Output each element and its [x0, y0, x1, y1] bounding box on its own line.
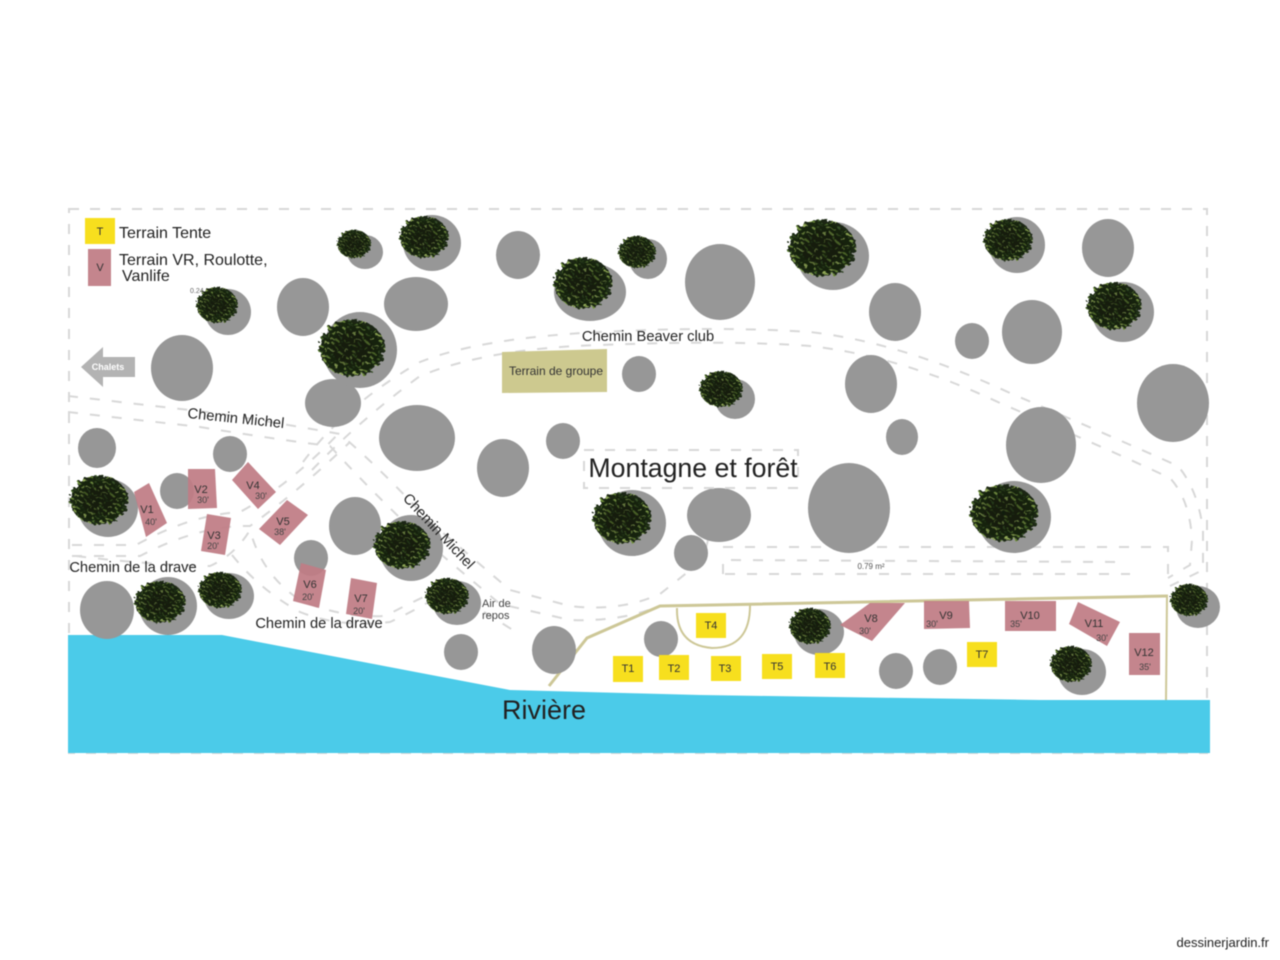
road label: Chemin Michel west: Chemin Michel: [187, 406, 285, 432]
legend: VR label: Vanlife: [122, 268, 170, 285]
site T6: T6: [824, 661, 836, 673]
site V11: [1069, 602, 1120, 646]
site V12: 35': [1139, 662, 1151, 672]
site T1: T1: [622, 663, 634, 675]
site V2: 30': [197, 495, 209, 505]
site V1: [134, 483, 167, 537]
site V12: [1129, 633, 1160, 675]
site V4: V4: [246, 480, 260, 492]
site V12: V12: [1134, 647, 1154, 659]
site T2: T2: [668, 663, 680, 675]
site V7: V7: [354, 593, 368, 605]
arrow: Chalets: [81, 347, 135, 387]
site boundary: [69, 209, 1207, 753]
site V10: V10: [1020, 610, 1040, 622]
site T7: T7: [976, 649, 988, 661]
site V6: [293, 563, 326, 608]
site V5: [259, 500, 308, 545]
site T3: T3: [719, 663, 731, 675]
trees: bushes with grey shadows: [70, 215, 1220, 695]
trees: plain grey canopies: [78, 219, 1209, 689]
site T5: [762, 654, 792, 679]
site V9: 30': [926, 619, 938, 629]
site V5: V5: [276, 516, 290, 528]
site V10: 35': [1010, 619, 1022, 629]
small area label: 0.24: [190, 288, 204, 295]
site V10: [1005, 601, 1056, 631]
site T7: [967, 642, 997, 667]
small area label 0.79: 0.79 m²: [857, 562, 885, 571]
legend: tent swatch: T: [97, 226, 104, 238]
site V9: V9: [939, 610, 953, 622]
site V3: 20': [207, 541, 219, 551]
group camping area: Terrain de groupe: [509, 364, 603, 378]
VR sites: [134, 462, 1160, 675]
site V4: 30': [255, 491, 267, 501]
legend: [85, 218, 268, 286]
legend: tent swatch: [85, 218, 115, 244]
site V6: 20': [302, 592, 314, 602]
site T2: [659, 655, 689, 680]
site T4: [696, 613, 726, 638]
site V5: 38': [274, 527, 286, 537]
road label: Chemin de la drave west: Chemin de la drave: [69, 560, 197, 576]
legend: VR swatch: [88, 249, 111, 286]
site V11: 30': [1096, 633, 1108, 643]
road label: Chemin Michel diagonal: Chemin Michel: [399, 491, 477, 573]
site V6: V6: [303, 579, 317, 591]
site V7: [346, 578, 377, 619]
site T3: [711, 656, 741, 681]
legend: VR label: Terrain VR, Roulotte,: [119, 252, 268, 269]
site V9: [924, 601, 970, 629]
site T6: [815, 653, 845, 678]
road label: Chemin de la drave south: Chemin de la drave: [255, 616, 383, 632]
river: [68, 635, 1210, 753]
road label: Chemin Beaver club: Chemin Beaver club: [582, 329, 714, 345]
fence: [549, 596, 1168, 700]
site V1: 40': [145, 517, 157, 527]
site V7: 20': [353, 606, 365, 616]
site V4: [232, 462, 276, 509]
heading: Rivière: Rivière: [502, 695, 586, 725]
group camping area: [502, 349, 607, 393]
label: Air de repos: repos: [482, 610, 510, 622]
dashed roads: [68, 329, 1203, 632]
heading area: Montagne et forêt: Montagne et forêt: [588, 453, 798, 483]
legend: tent label: Terrain Tente: [119, 225, 211, 242]
site V11: V11: [1085, 618, 1103, 630]
site T5: T5: [771, 661, 783, 673]
site V8: [840, 603, 905, 641]
site V3: V3: [207, 530, 221, 542]
site V2: [188, 469, 217, 509]
credit: dessinerjardin.fr: [1176, 935, 1270, 950]
site V2: V2: [194, 484, 208, 496]
site V3: [201, 514, 231, 555]
site T1: [613, 656, 643, 682]
label: Air de repos: Air de: [482, 598, 511, 610]
arrow: Chalets: Chalets: [92, 362, 124, 372]
site T4: T4: [705, 620, 717, 632]
site V8: 30': [859, 626, 871, 636]
legend: VR swatch: V: [96, 262, 104, 274]
site V8: V8: [864, 613, 878, 625]
tent sites: [613, 613, 997, 682]
site V1: V1: [140, 504, 154, 516]
